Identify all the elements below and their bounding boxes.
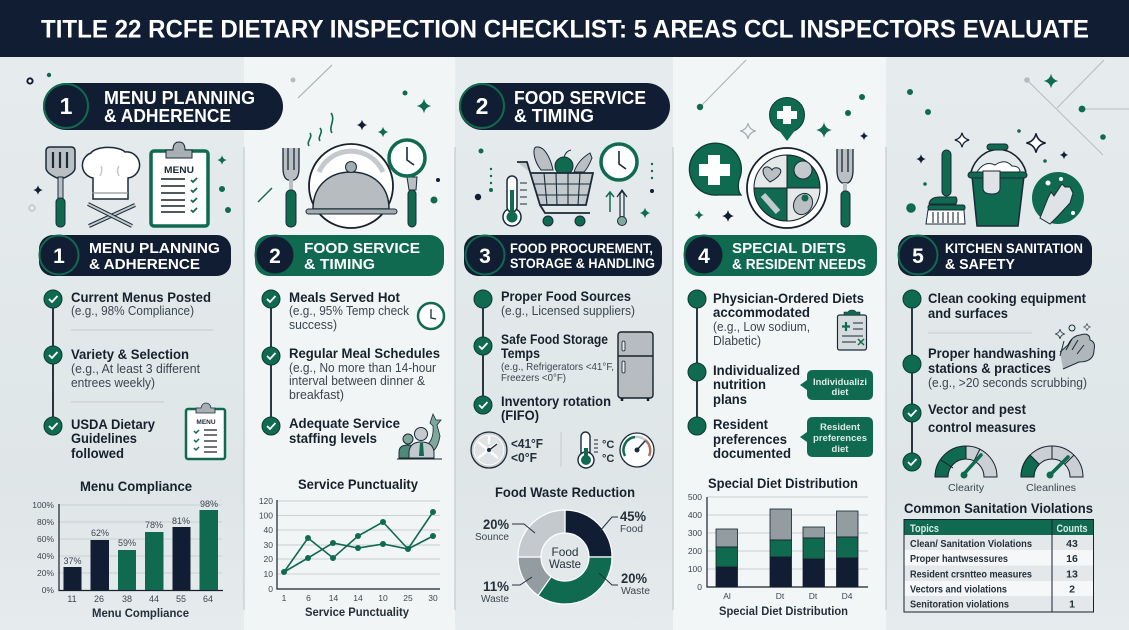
checklist: special diets: Individualized bbox=[713, 363, 800, 378]
decorative sparkles and dots bbox=[27, 60, 1129, 222]
checklist: kitchen sanitation: stations & practices bbox=[928, 361, 1051, 376]
icon: diet clipboard bbox=[838, 310, 866, 350]
pill 4: 4 bbox=[698, 245, 710, 268]
pill 5: KITCHEN SANITATION bbox=[945, 240, 1083, 256]
checklist: menu planning: (e.g., 98% Compliance) bbox=[71, 304, 194, 318]
chart title: food waste reduction: Food Waste Reduction bbox=[495, 484, 635, 500]
top pill: food service: 2 bbox=[476, 93, 488, 119]
stacked bar chart: special diets: D4 bbox=[842, 591, 853, 601]
donut chart: food waste: 20% bbox=[483, 516, 510, 532]
callout: individualized diet bbox=[800, 370, 873, 400]
stacked bar chart: special diets: 300 bbox=[688, 528, 702, 538]
donut chart: food waste: Waste bbox=[621, 586, 650, 597]
title banner bbox=[0, 0, 1129, 57]
pill 4 bbox=[684, 235, 877, 276]
checklist: food procurement: Proper Food Sources bbox=[501, 289, 631, 304]
bar chart: menu compliance: 64 bbox=[203, 594, 213, 604]
checklist: food service: Adequate Service bbox=[289, 416, 400, 431]
bar chart: menu compliance: 59% bbox=[118, 538, 136, 548]
stacked bar chart: special diets: 500 bbox=[688, 492, 702, 502]
stacked bar chart: special diets: Al bbox=[723, 591, 731, 601]
pill 2 bbox=[255, 235, 444, 276]
checklist: food procurement: Safe Food Storage bbox=[501, 332, 608, 347]
top pill: food service bbox=[459, 83, 670, 130]
bar chart: menu compliance: 20% bbox=[37, 568, 54, 578]
stacked bar chart: special diets: 200 bbox=[688, 546, 702, 556]
table: sanitation violations: 1 bbox=[1069, 598, 1075, 610]
stacked bar chart: special diets: 0 bbox=[697, 582, 702, 592]
top pill: menu planning: & ADHERENCE bbox=[104, 106, 231, 126]
checklist: menu planning: followed bbox=[71, 446, 124, 461]
bar chart: menu compliance: 0% bbox=[42, 585, 54, 595]
callout: individualized diet: Individualizi bbox=[813, 377, 867, 388]
checklist: special diets: documented bbox=[713, 446, 791, 461]
checklist: kitchen sanitation: (e.g., >20 seconds scrubbing) bbox=[928, 376, 1087, 390]
bar chart: menu compliance: 81% bbox=[172, 516, 190, 526]
icon group: medical bubbles, plate, fork bbox=[689, 98, 853, 228]
checklist: food service: interval between dinner & bbox=[289, 374, 426, 388]
donut chart: food waste: Waste bbox=[481, 594, 509, 605]
checklist: kitchen sanitation: control measures bbox=[928, 420, 1036, 435]
chart title: special diet distribution: Special Diet Distribution bbox=[708, 475, 858, 491]
checklist: kitchen sanitation bbox=[903, 290, 1087, 471]
line chart: service punctuality: 10 bbox=[378, 593, 388, 603]
icon: menu clipboard small bbox=[186, 403, 225, 459]
bar chart: menu compliance: 44 bbox=[149, 594, 159, 604]
table: sanitation violations: 43 bbox=[1066, 538, 1078, 550]
top pill: menu planning: MENU PLANNING bbox=[104, 88, 255, 108]
icon: temperature dials with readings: <41°F bbox=[511, 437, 543, 451]
gauge: clearity bbox=[935, 446, 997, 494]
table: sanitation violations bbox=[904, 520, 1094, 612]
checklist: kitchen sanitation: Vector and pest bbox=[928, 402, 1026, 417]
pill 5 bbox=[898, 235, 1092, 276]
chart axis title: service punctuality: Service Punctuality bbox=[305, 605, 409, 619]
table: sanitation violations: 13 bbox=[1066, 568, 1078, 580]
table: sanitation violations: Proper hantwsessures bbox=[910, 553, 1008, 565]
checklist: special diets bbox=[688, 290, 864, 461]
checklist: food procurement: (FIFO) bbox=[501, 408, 539, 423]
table title: common sanitation violations: Common Sanitation Violations bbox=[904, 500, 1093, 516]
bar chart: menu compliance: 38 bbox=[122, 594, 132, 604]
checklist: food procurement: (e.g., Licensed suppliers) bbox=[501, 304, 635, 318]
top pill: food service: & TIMING bbox=[514, 106, 594, 126]
icon group: cloche, fork, clock bbox=[283, 113, 425, 228]
bar chart: menu compliance: 55 bbox=[176, 594, 186, 604]
icon: menu clipboard small: MENU bbox=[196, 419, 216, 426]
top pill: menu planning: 1 bbox=[60, 93, 73, 119]
bar chart: menu compliance: 26 bbox=[94, 594, 104, 604]
gauge: cleanlines bbox=[1021, 446, 1083, 494]
checklist: menu planning: (e.g., At least 3 different bbox=[71, 362, 201, 376]
checklist: food service: breakfast) bbox=[289, 388, 344, 402]
bar chart: menu compliance: 11 bbox=[67, 594, 77, 604]
checklist: menu planning bbox=[44, 290, 213, 461]
line chart: service punctuality: 120 bbox=[259, 496, 273, 506]
pill 5: & SAFETY bbox=[945, 256, 1015, 273]
line chart: service punctuality: 0 bbox=[268, 584, 273, 594]
donut chart: food waste: Waste bbox=[549, 557, 581, 571]
checklist: special diets: preferences bbox=[713, 432, 787, 447]
checklist: menu planning: entrees weekly) bbox=[71, 376, 155, 390]
pill 1: & ADHERENCE bbox=[89, 256, 200, 273]
checklist: special diets: (e.g., Low sodium, bbox=[713, 320, 810, 334]
checklist: food service bbox=[262, 290, 440, 446]
checklist: special diets: Physician-Ordered Diets bbox=[713, 291, 864, 306]
line chart: service punctuality: 100 bbox=[259, 510, 273, 520]
bar chart: menu compliance: 60% bbox=[37, 534, 54, 544]
callout: resident preferences diet: diet bbox=[832, 444, 849, 455]
pill 1: 1 bbox=[53, 245, 65, 268]
pill 1: MENU PLANNING bbox=[89, 240, 220, 257]
checklist: food procurement: Inventory rotation bbox=[501, 394, 611, 409]
checklist: special diets: Resident bbox=[713, 417, 768, 432]
checklist: food procurement: Freezers <0°F) bbox=[501, 372, 566, 384]
pill 5: 5 bbox=[912, 245, 924, 268]
checklist: menu planning: Guidelines bbox=[71, 431, 137, 446]
icon group: cart, thermometer, clock bbox=[503, 144, 637, 226]
donut chart: food waste: Food bbox=[552, 545, 578, 559]
gauge: clearity: Clearity bbox=[948, 482, 985, 494]
pill 3 bbox=[464, 235, 662, 276]
line chart: service punctuality: 25 bbox=[403, 593, 413, 603]
pill 2: 2 bbox=[269, 245, 281, 268]
table: sanitation violations: Clean/ Sanitation Violations bbox=[910, 538, 1032, 550]
title banner: TITLE 22 RCFE DIETARY INSPECTION CHECKLIST: 5 AREAS CCL INSPECTORS EVALUATE bbox=[41, 16, 1089, 44]
bar chart: menu compliance: 80% bbox=[37, 517, 54, 527]
icon: temperature dials with readings: <0°F bbox=[511, 451, 537, 465]
table: sanitation violations: Vectors and violations bbox=[910, 584, 1007, 596]
pill 1 bbox=[39, 235, 231, 276]
bar chart: menu compliance: 40% bbox=[37, 551, 54, 561]
donut chart: food waste: 20% bbox=[621, 570, 648, 586]
bar chart: menu compliance: 78% bbox=[145, 520, 163, 530]
donut chart: food waste: Sounce bbox=[475, 532, 509, 543]
checklist: kitchen sanitation: Clean cooking equipment bbox=[928, 291, 1086, 306]
top pill: menu planning bbox=[43, 83, 283, 130]
table: sanitation violations: Resident crsntteo measures bbox=[910, 568, 1032, 580]
table: sanitation violations: Senitoration violations bbox=[910, 598, 1009, 610]
checklist: kitchen sanitation: Proper handwashing bbox=[928, 346, 1056, 361]
line chart: service punctuality: 30 bbox=[428, 593, 438, 603]
checklist: kitchen sanitation: and surfaces bbox=[928, 306, 1008, 321]
stacked bar chart: special diets: Dt bbox=[776, 591, 785, 601]
top pill: food service: FOOD SERVICE bbox=[514, 88, 646, 108]
table: sanitation violations: 16 bbox=[1066, 553, 1078, 565]
checklist: food service: (e.g., 95% Temp check bbox=[289, 304, 410, 318]
stacked bar chart: special diets bbox=[688, 492, 868, 601]
icon group: brush, bucket, clean hand bbox=[926, 144, 1084, 226]
checklist: food service: staffing levels bbox=[289, 431, 377, 446]
gauge: cleanlines: Cleanlines bbox=[1026, 482, 1076, 494]
callout: individualized diet: diet bbox=[832, 387, 849, 398]
checklist: special diets: accommodated bbox=[713, 305, 810, 320]
icon: handwashing bbox=[1055, 323, 1094, 369]
icon group: spatula, chef hat, menu clipboard bbox=[46, 142, 208, 227]
callout: resident preferences diet: preferences bbox=[813, 433, 867, 444]
checklist: food service: Meals Served Hot bbox=[289, 290, 400, 305]
donut chart: food waste: 45% bbox=[620, 508, 647, 524]
pill 3: 3 bbox=[479, 245, 491, 268]
icon: clock bbox=[418, 303, 444, 329]
callout: resident preferences diet bbox=[800, 417, 873, 457]
pill 4: & RESIDENT NEEDS bbox=[732, 256, 866, 273]
stacked bar chart: special diets: 100 bbox=[688, 564, 702, 574]
donut chart: food waste: Food bbox=[620, 524, 643, 535]
line chart: service punctuality: 40 bbox=[264, 525, 273, 535]
table: sanitation violations: 2 bbox=[1069, 584, 1075, 596]
bar chart: menu compliance: 98% bbox=[200, 499, 218, 509]
chart axis title: menu compliance: Menu Compliance bbox=[92, 606, 189, 620]
table: sanitation violations: Counts bbox=[1056, 523, 1088, 535]
icon group: spatula, chef hat, menu clipboard: MENU bbox=[164, 165, 194, 175]
icon: temperature dials with readings: °C bbox=[602, 439, 614, 451]
bar chart: menu compliance: 62% bbox=[91, 528, 109, 538]
icon: staff group bbox=[397, 414, 442, 459]
chart title: menu compliance: Menu Compliance bbox=[80, 478, 192, 494]
line chart: service punctuality: 14 bbox=[353, 593, 363, 603]
bar chart: menu compliance: 37% bbox=[63, 556, 82, 566]
line chart: service punctuality bbox=[259, 496, 440, 603]
stacked bar chart: special diets: Dt bbox=[809, 591, 818, 601]
stacked bar chart: special diets: 400 bbox=[688, 510, 702, 520]
checklist: food service: success) bbox=[289, 318, 337, 332]
donut chart: food waste bbox=[475, 508, 650, 605]
bar chart: menu compliance: 100% bbox=[32, 500, 54, 510]
table: sanitation violations: Topics bbox=[910, 523, 939, 535]
line chart: service punctuality: 10 bbox=[264, 569, 273, 579]
line chart: service punctuality: 14 bbox=[329, 593, 338, 603]
pill 3: FOOD PROCUREMENT, bbox=[510, 241, 653, 256]
checklist: menu planning: USDA Dietary bbox=[71, 417, 155, 432]
pill 2: FOOD SERVICE bbox=[304, 240, 420, 257]
checklist: food service: (e.g., No more than 14-hour bbox=[289, 361, 436, 375]
chart axis title: special diet distribution: Special Diet Distribution bbox=[719, 604, 848, 618]
checklist: menu planning: Current Menus Posted bbox=[71, 290, 211, 305]
pill 4: SPECIAL DIETS bbox=[732, 240, 846, 257]
donut chart: food waste: 11% bbox=[483, 578, 510, 594]
checklist: food procurement: Temps bbox=[501, 346, 540, 361]
checklist: food service: Regular Meal Schedules bbox=[289, 346, 440, 361]
bar chart: menu compliance bbox=[32, 499, 223, 604]
line chart: service punctuality: 20 bbox=[264, 554, 273, 564]
checklist: food procurement bbox=[474, 289, 635, 423]
icon: temperature dials with readings: °C bbox=[602, 453, 614, 465]
line chart: service punctuality: 30 bbox=[264, 540, 273, 550]
icon: refrigerator bbox=[618, 332, 653, 401]
line chart: service punctuality: 6 bbox=[306, 593, 311, 603]
checklist: special diets: plans bbox=[713, 392, 747, 407]
callout: resident preferences diet: Resident bbox=[820, 422, 861, 433]
checklist: food procurement: (e.g., Refrigerators <41°F, bbox=[501, 361, 614, 373]
icon: temperature dials with readings bbox=[471, 432, 654, 468]
checklist: menu planning: Variety & Selection bbox=[71, 347, 189, 362]
chart title: service punctuality: Service Punctuality bbox=[298, 476, 418, 492]
pill 2: & TIMING bbox=[304, 256, 375, 273]
checklist: special diets: Dlabetic) bbox=[713, 334, 761, 348]
pill 3: STORAGE & HANDLING bbox=[510, 256, 655, 271]
line chart: service punctuality: 1 bbox=[282, 593, 287, 603]
checklist: special diets: nutrition bbox=[713, 377, 766, 392]
